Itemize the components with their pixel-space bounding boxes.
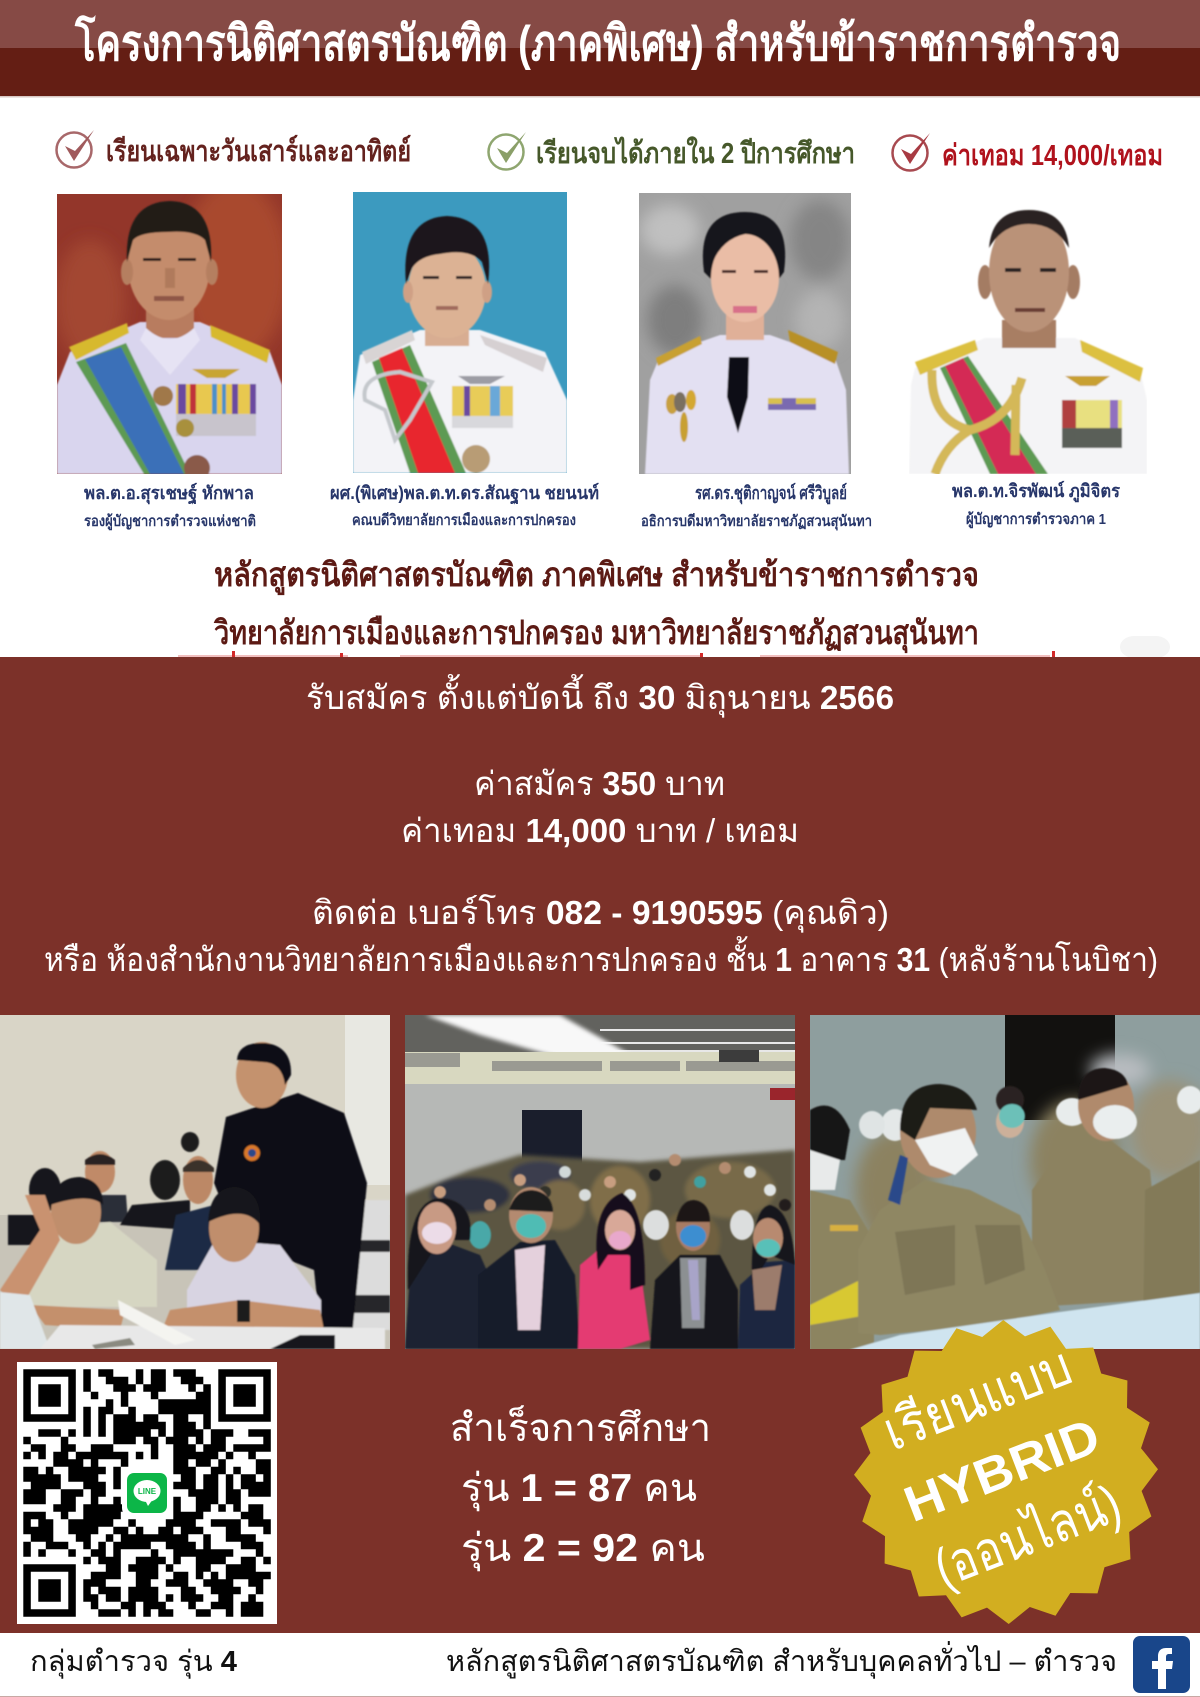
panel: application details [0, 657, 1200, 1357]
caption 2 [330, 482, 599, 529]
badge text: (ออนไลน์) [926, 1472, 1129, 1599]
badge text: HYBRID [897, 1407, 1107, 1533]
caption 3: รศ.ดร.ชุติกาญจน์ ศรีวิบูลย์ [695, 482, 847, 505]
photo: uniformed officers [810, 1015, 1200, 1350]
badge text: เรียนแบบ [875, 1336, 1080, 1462]
graduates statistics [450, 1404, 711, 1572]
programme heading: วิทยาลัยการเมืองและการปกครอง มหาวิทยาลัยราชภัฏสวนสุนันทา [214, 614, 979, 654]
badge: hybrid learning [854, 1320, 1158, 1624]
feature: weekend study [56, 130, 411, 168]
caption 2: คณบดีวิทยาลัยการเมืองและการปกครอง [352, 511, 576, 529]
caption 2: ผศ.(พิเศษ)พล.ต.ท.ดร.สัณฐาน ชยนนท์ [330, 482, 599, 505]
icon: facebook [1133, 1636, 1190, 1693]
feature: weekend study: เรียนเฉพาะวันเสาร์และอาทิตย์ [106, 134, 411, 168]
contact phone: ติดต่อ เบอร์โทร 082 - 9190595 (คุณดิว) [312, 894, 889, 933]
tuition fee: ค่าเทอม 14,000 บาท / เทอม [401, 812, 799, 849]
caption 4: ผู้บัญชาการตำรวจภาค 1 [966, 511, 1106, 529]
footer bar [0, 1633, 1200, 1697]
caption 1 [84, 482, 256, 531]
header banner [0, 0, 1200, 98]
portrait captions [84, 480, 1120, 531]
caption 3 [641, 482, 872, 531]
graduates statistics: รุ่น 1 = 87 คน [461, 1467, 697, 1512]
feature: finish in 2 years [488, 132, 855, 170]
icon: LINE logo [122, 1468, 172, 1518]
caption 1: รองผู้บัญชาการตำรวจแห่งชาติ [84, 512, 256, 531]
badge text [875, 1336, 1129, 1599]
panel: lower maroon band [0, 1349, 1200, 1633]
caption 3: อธิการบดีมหาวิทยาลัยราชภัฏสวนสุนันทา [641, 512, 872, 531]
feature: finish in 2 years: เรียนจบได้ภายใน 2 ปีการศึกษา [536, 136, 855, 170]
programme heading: หลักสูตรนิติศาสตรบัณฑิต ภาคพิเศษ สำหรับข้าราชการตำรวจ [214, 556, 979, 596]
application fee: ค่าสมัคร 350 บาท [474, 765, 725, 802]
photo: classroom with instructor [0, 1015, 390, 1349]
caption 4: พล.ต.ท.จิรพัฒน์ ภูมิจิตร [952, 480, 1120, 503]
footer right label: หลักสูตรนิติศาสตรบัณฑิต สำหรับบุคคลทั่วไป – ตำรวจ [446, 1641, 1117, 1679]
feature: tuition [892, 133, 1163, 172]
programme heading [214, 556, 979, 654]
portrait 3 [639, 193, 851, 474]
portrait 2 [353, 192, 567, 473]
application period: รับสมัคร ตั้งแต่บัดนี้ ถึง 30 มิถุนายน 2566 [306, 674, 894, 718]
QR code [17, 1362, 277, 1624]
icon: LINE logo: LINE [138, 1487, 157, 1496]
portrait 4 [909, 210, 1147, 474]
photo: group in auditorium [405, 1015, 795, 1349]
graduates statistics: รุ่น 2 = 92 คน [461, 1527, 705, 1572]
graduates statistics: สำเร็จการศึกษา [450, 1404, 711, 1450]
caption 1: พล.ต.อ.สุรเชษฐ์ หักพาล [84, 482, 254, 505]
clipped red line remnant [178, 636, 1170, 658]
footer left label: กลุ่มตำรวจ รุ่น 4 [30, 1646, 237, 1679]
contact office: หรือ ห้องสำนักงานวิทยาลัยการเมืองและการปกครอง ชั้น 1 อาคาร 31 (หลังร้านโนบิชา) [44, 936, 1158, 978]
caption 4 [952, 480, 1120, 529]
portrait 1 [57, 194, 282, 474]
